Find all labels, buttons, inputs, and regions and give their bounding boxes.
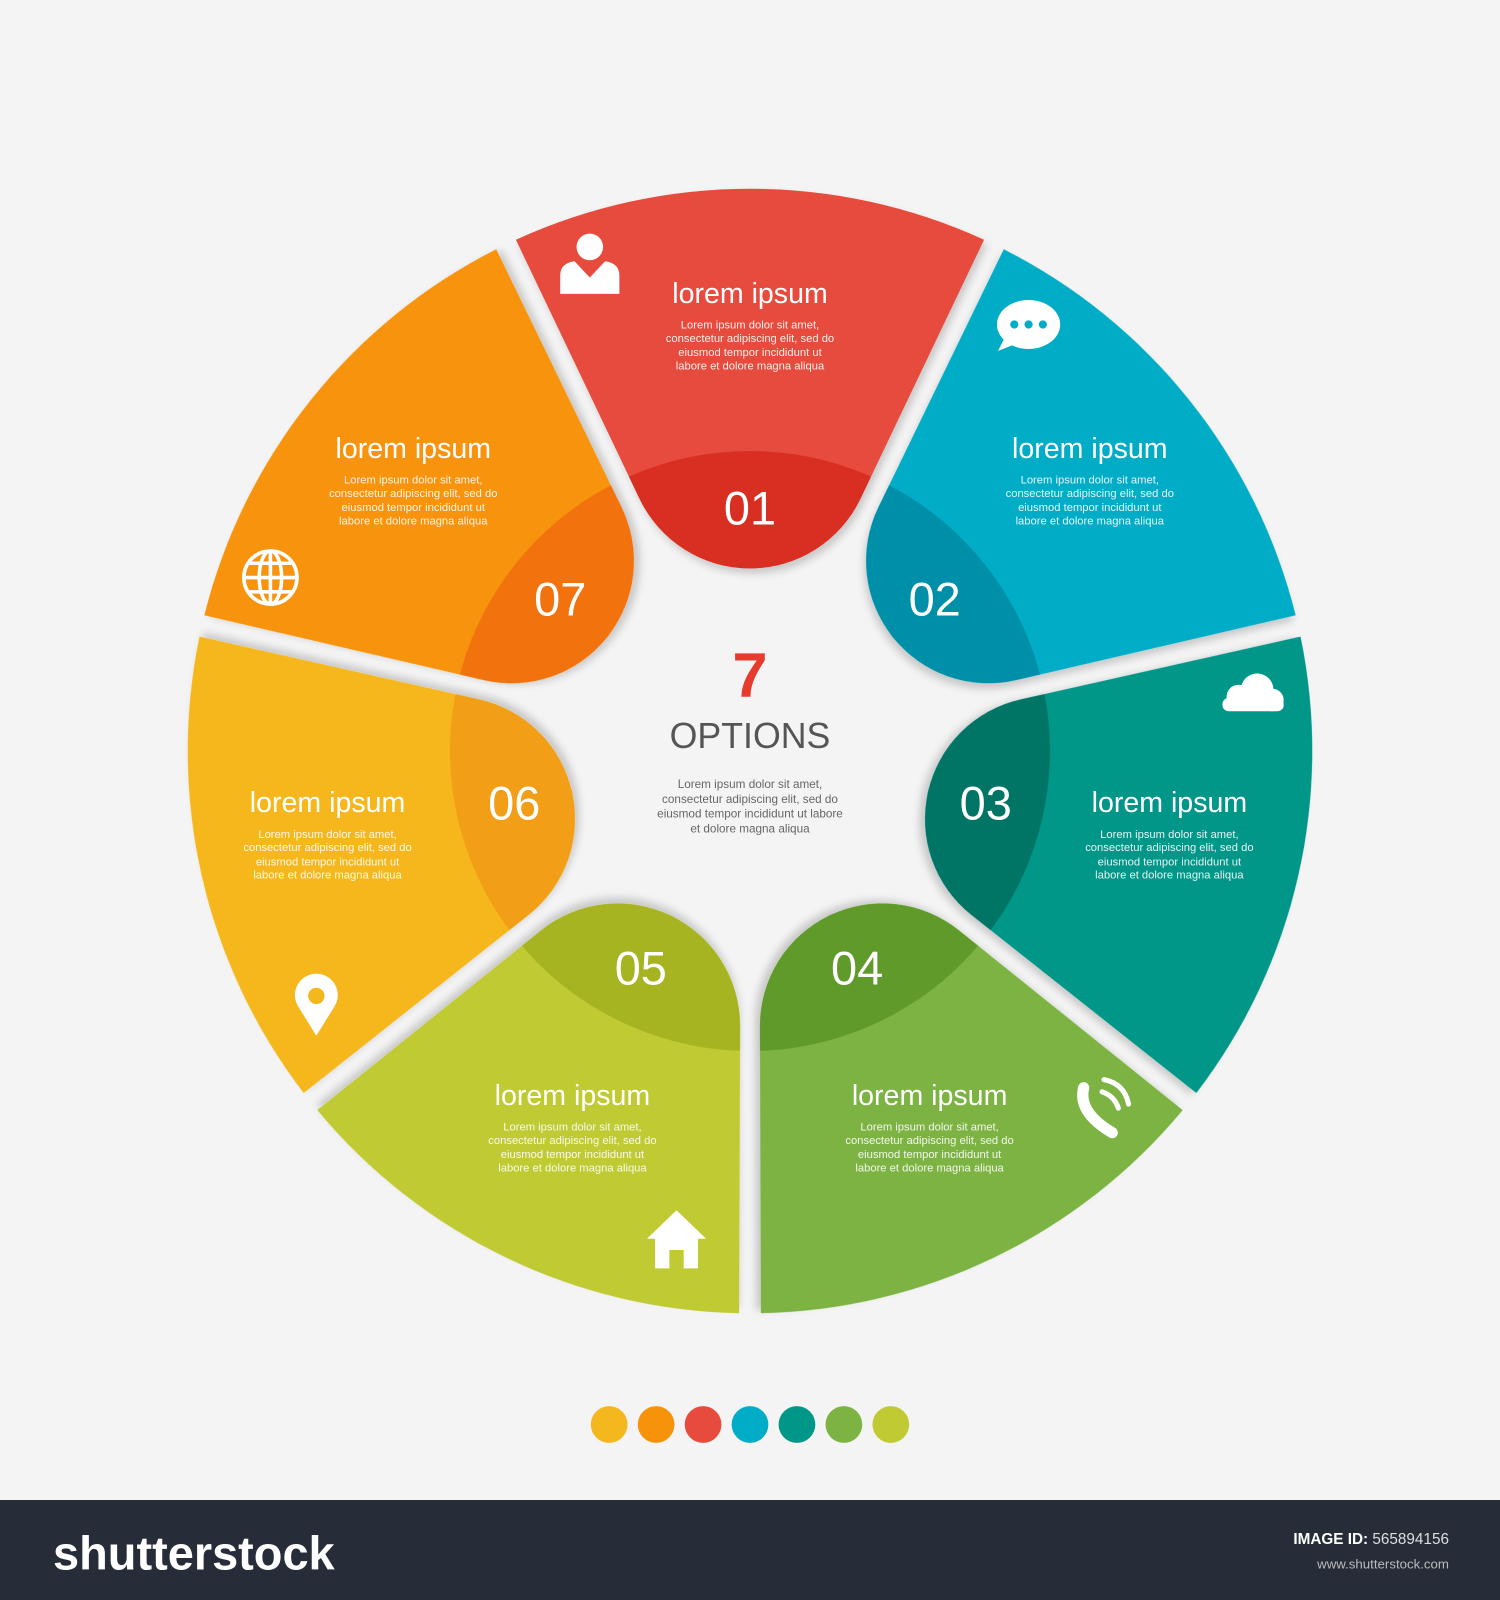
text 01: consectetur adipiscing elit, sed do <box>666 333 834 345</box>
text 07 <box>329 433 586 625</box>
center title: et dolore magna aliqua <box>690 823 810 836</box>
text 07: labore et dolore magna aliqua <box>339 515 488 527</box>
text 05: eiusmod tempor incididunt ut <box>501 1149 645 1161</box>
text 06: Lorem ipsum dolor sit amet, <box>258 829 397 841</box>
icon: cloud <box>1222 673 1284 711</box>
text 04 <box>831 943 1014 1174</box>
text 03: consectetur adipiscing elit, sed do <box>1085 842 1254 854</box>
text 05: consectetur adipiscing elit, sed do <box>488 1135 657 1147</box>
text 04: 04 <box>831 943 883 995</box>
text 03: 03 <box>960 777 1012 829</box>
center title: eiusmod tempor incididunt ut labore <box>657 807 843 820</box>
text 07: consectetur adipiscing elit, sed do <box>329 488 497 500</box>
footer <box>0 1500 1500 1600</box>
text 01: Lorem ipsum dolor sit amet, <box>681 320 819 332</box>
text 06: lorem ipsum <box>250 787 405 819</box>
center title: 7 <box>732 641 768 711</box>
text 02: lorem ipsum <box>1012 433 1168 465</box>
icon: person <box>560 234 619 294</box>
text 01: 01 <box>724 482 776 534</box>
text 05: labore et dolore magna aliqua <box>498 1162 647 1174</box>
footer: shutterstock <box>53 1527 336 1579</box>
text 03: lorem ipsum <box>1092 787 1247 819</box>
icon: globe <box>244 551 297 604</box>
text 06 <box>243 777 540 882</box>
segment 05 <box>316 894 743 1314</box>
text 02: Lorem ipsum dolor sit amet, <box>1021 475 1159 487</box>
text 01: eiusmod tempor incididunt ut <box>678 347 823 359</box>
segment 03 <box>916 636 1313 1096</box>
segment 02 <box>860 249 1296 692</box>
texts for segments <box>243 278 1254 1174</box>
segment 06 <box>187 630 582 1093</box>
text 05: 05 <box>615 943 667 995</box>
text 05: Lorem ipsum dolor sit amet, <box>503 1122 642 1134</box>
icon: chat <box>997 300 1060 351</box>
text 04: Lorem ipsum dolor sit amet, <box>860 1122 999 1134</box>
text 02: consectetur adipiscing elit, sed do <box>1006 488 1174 500</box>
center title: OPTIONS <box>670 716 830 756</box>
text 06: 06 <box>488 777 540 829</box>
text 02: eiusmod tempor incididunt ut <box>1018 502 1162 514</box>
icon: home <box>647 1210 706 1268</box>
text 01: labore et dolore magna aliqua <box>676 360 825 372</box>
footer: IMAGE ID: 565894156 <box>1293 1531 1449 1548</box>
text 01: lorem ipsum <box>672 278 828 310</box>
segment 01 <box>516 188 988 577</box>
icon: pin <box>295 974 338 1036</box>
text 02: labore et dolore magna aliqua <box>1016 515 1165 527</box>
text 03: eiusmod tempor incididunt ut <box>1098 856 1242 868</box>
text 06: consectetur adipiscing elit, sed do <box>243 842 412 854</box>
legend dots <box>591 1406 909 1443</box>
text 07: 07 <box>534 573 586 625</box>
center title <box>657 641 843 836</box>
segment 04 <box>752 897 1183 1314</box>
text 06: eiusmod tempor incididunt ut <box>256 856 400 868</box>
text 07: lorem ipsum <box>335 433 491 465</box>
text 03: labore et dolore magna aliqua <box>1095 870 1244 882</box>
footer: www.shutterstock.com <box>1316 1556 1449 1571</box>
text 03 <box>960 777 1254 882</box>
text 02: 02 <box>909 573 961 625</box>
text 02 <box>909 433 1174 625</box>
icon: phone <box>1083 1080 1129 1133</box>
text 04: labore et dolore magna aliqua <box>855 1162 1005 1174</box>
text 05 <box>488 943 667 1174</box>
text 01 <box>666 278 834 534</box>
text 07: Lorem ipsum dolor sit amet, <box>344 475 482 487</box>
text 04: consectetur adipiscing elit, sed do <box>845 1135 1014 1147</box>
segment 07 <box>204 249 643 688</box>
center title: Lorem ipsum dolor sit amet, <box>678 778 822 791</box>
text 03: Lorem ipsum dolor sit amet, <box>1100 829 1239 841</box>
text 04: eiusmod tempor incididunt ut <box>858 1149 1002 1161</box>
text 07: eiusmod tempor incididunt ut <box>342 502 486 514</box>
text 05: lorem ipsum <box>495 1080 650 1112</box>
text 06: labore et dolore magna aliqua <box>253 870 403 882</box>
center title: consectetur adipiscing elit, sed do <box>662 793 838 806</box>
text 04: lorem ipsum <box>852 1080 1007 1112</box>
